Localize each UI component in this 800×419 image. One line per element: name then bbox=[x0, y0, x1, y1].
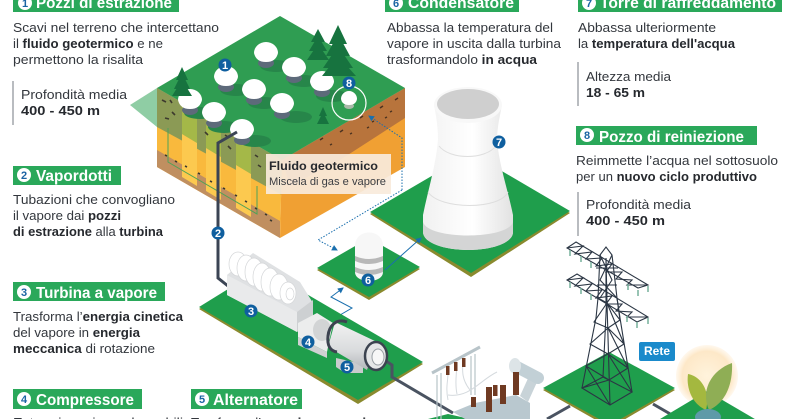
panel: geothermal ground block bbox=[130, 16, 405, 238]
callout: fluido geotermico bbox=[266, 154, 391, 194]
section 7: torre di raffreddamento: Abbassa ulteriormente bbox=[578, 20, 716, 35]
section 2: vapordotti: Vapordotti bbox=[36, 168, 112, 185]
section 5: alternatore: 5 bbox=[199, 394, 205, 406]
panel: condenser platform bbox=[317, 232, 420, 300]
callout: fluido geotermico: Fluido geotermico bbox=[269, 159, 378, 173]
badges: numbered markers on the illustration: 6 bbox=[365, 275, 371, 287]
section 3: turbina a vapore: meccanica di rotazione bbox=[13, 341, 155, 356]
insulators bbox=[570, 250, 648, 328]
pylon bbox=[567, 242, 648, 405]
section 1: pozzi di estrazione: 400 - 450 m bbox=[21, 103, 100, 118]
section 8: pozzo di reiniezione: Profondità media bbox=[586, 197, 692, 212]
section 2: vapordotti: il vapore dai pozzi bbox=[13, 208, 121, 223]
compressor bbox=[298, 313, 333, 358]
right soil face bbox=[280, 88, 405, 238]
label: Rete: Rete bbox=[644, 346, 670, 358]
section 7: torre di raffreddamento: la temperatura dell'acqua bbox=[578, 36, 736, 51]
section 4: compressore: 4 bbox=[21, 394, 28, 406]
section 7: torre di raffreddamento: 18 - 65 m bbox=[586, 85, 645, 100]
section 1: pozzi di estrazione: il fluido geotermico e ne bbox=[13, 36, 163, 51]
section 5: alternatore bbox=[191, 389, 382, 419]
section 1: pozzi di estrazione: permettono la risalita bbox=[13, 52, 144, 67]
pipe: steam duct bbox=[218, 132, 237, 286]
turbine bbox=[227, 252, 313, 332]
label: Rete bbox=[639, 342, 675, 361]
badges: numbered markers on the illustration: 5 bbox=[344, 362, 350, 374]
section 7: torre di raffreddamento: Altezza media bbox=[586, 69, 672, 84]
section 3: turbina a vapore: Turbina a vapore bbox=[36, 285, 157, 302]
substation transformer bbox=[428, 347, 538, 419]
section 4: compressore bbox=[13, 389, 183, 419]
section 1: pozzi di estrazione: Scavi nel terreno che intercettano bbox=[13, 20, 219, 35]
section 6: condensatore: trasformandolo in acqua bbox=[387, 52, 538, 67]
section 8: pozzo di reiniezione bbox=[576, 126, 778, 236]
callout: fluido geotermico: Miscela di gas e vapore bbox=[269, 176, 386, 188]
section 3: turbina a vapore: 3 bbox=[21, 287, 27, 299]
section 3: turbina a vapore bbox=[13, 282, 184, 356]
icon: plant with glow bbox=[655, 345, 760, 419]
badges: numbered markers on the illustration: 2 bbox=[215, 228, 221, 240]
section 1: pozzi di estrazione: Profondità media bbox=[21, 87, 128, 102]
pipe: transformer to pylon and plant bbox=[547, 404, 672, 419]
badges: numbered markers on the illustration: 3 bbox=[248, 306, 254, 318]
alternator bbox=[328, 321, 387, 373]
arrow: condensed water to cooling tower bbox=[331, 238, 421, 315]
section 6: condensatore: Abbassa la temperatura del bbox=[387, 20, 553, 35]
pipe: alternator output bbox=[380, 357, 453, 413]
badges: numbered markers on the illustration bbox=[212, 58, 506, 374]
section 6: condensatore bbox=[385, 0, 562, 67]
section 8: pozzo di reiniezione: per un nuovo ciclo produttivo bbox=[576, 169, 757, 184]
badges: numbered markers on the illustration: 4 bbox=[305, 337, 312, 349]
section 8: pozzo di reiniezione: 400 - 450 m bbox=[586, 213, 665, 228]
grass top bbox=[157, 16, 405, 160]
wells: domes bbox=[178, 42, 348, 147]
section 1: pozzi di estrazione bbox=[13, 0, 219, 125]
section 2: vapordotti: di estrazione alla turbina bbox=[13, 224, 164, 239]
section 8: pozzo di reiniezione: Reimmette l’acqua nel sottosuolo bbox=[576, 153, 778, 168]
insulators bbox=[446, 358, 519, 412]
section 2: vapordotti: Tubazioni che convogliano bbox=[13, 192, 175, 207]
section 5: alternatore: Alternatore bbox=[213, 392, 298, 409]
transformer body and radiator bbox=[453, 358, 538, 419]
gantry bbox=[432, 347, 497, 419]
dashed arrows: reinjection and condensate circuit bbox=[318, 116, 402, 250]
section 7: torre di raffreddamento bbox=[578, 0, 782, 106]
trees bbox=[172, 25, 356, 124]
section 8: pozzo di reiniezione: 8 bbox=[584, 130, 590, 142]
badges: numbered markers on the illustration: 7 bbox=[496, 137, 502, 149]
section 6: condensatore: vapore in uscita dalla turbina bbox=[387, 36, 562, 51]
condenser vessel bbox=[355, 232, 383, 281]
section 3: turbina a vapore: Trasforma l’energia cinetica bbox=[13, 309, 184, 324]
panel: turbine platform bbox=[199, 252, 453, 413]
panel: pylon platform bbox=[543, 242, 675, 419]
section 2: vapordotti bbox=[13, 166, 175, 239]
badges: numbered markers on the illustration: 1 bbox=[222, 60, 228, 72]
cooling tower bbox=[423, 87, 513, 250]
section 3: turbina a vapore: del vapore in energia bbox=[13, 325, 141, 340]
reinjection well ring bbox=[332, 86, 366, 120]
depth marker triangle bbox=[130, 88, 157, 127]
panel: cooling tower platform bbox=[370, 87, 570, 277]
section 8: pozzo di reiniezione: Pozzo di reiniezione bbox=[599, 129, 744, 146]
section 2: vapordotti: 2 bbox=[21, 170, 27, 182]
left soil face bbox=[157, 88, 282, 238]
badges: numbered markers on the illustration: 8 bbox=[346, 78, 352, 90]
section 4: compressore: Compressore bbox=[36, 392, 134, 409]
